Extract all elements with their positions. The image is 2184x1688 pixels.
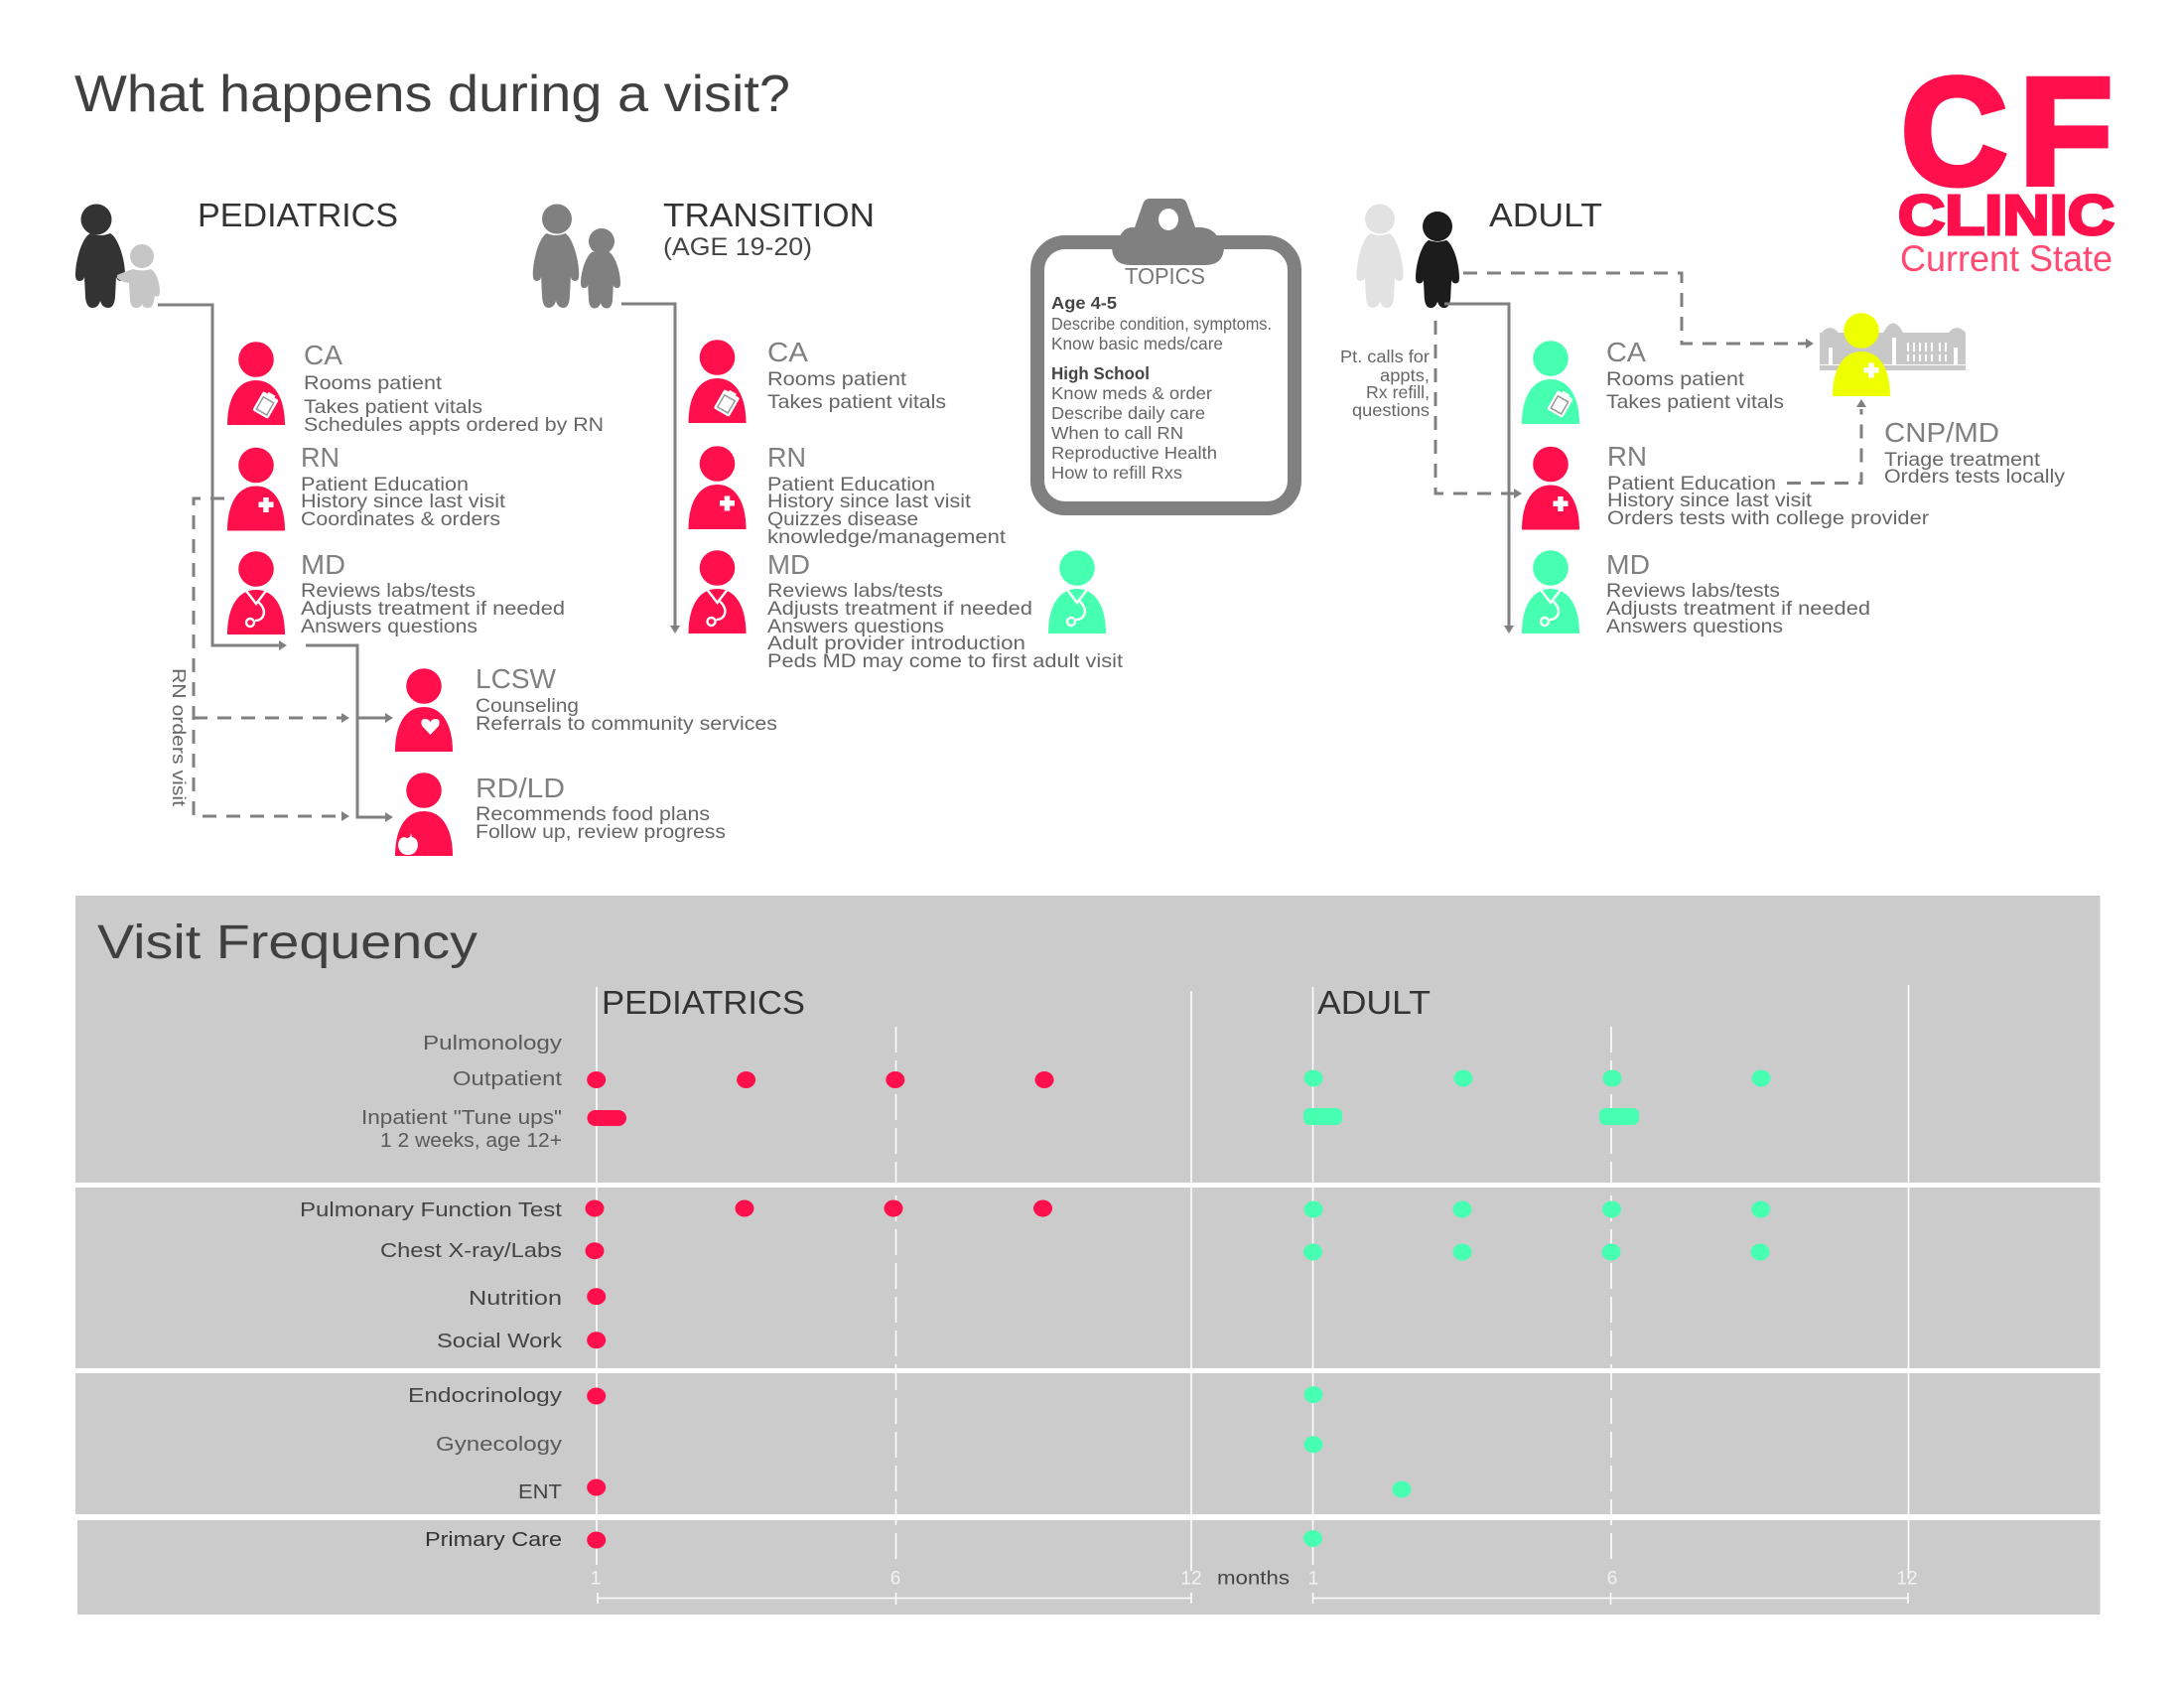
icon: CNP/MD person — [1833, 313, 1890, 396]
text: CA: Rooms patient — [1606, 368, 1745, 390]
icon: RN person — [689, 446, 747, 529]
row labels: Inpatient "Tune ups" — [361, 1107, 562, 1129]
heading: pediatrics: PEDIATRICS — [198, 197, 398, 233]
text: RN: Coordinates & orders — [301, 508, 500, 530]
logo: CF Clinic Current State: CLINIC — [1898, 184, 2115, 247]
page title: What happens during a visit? — [74, 66, 790, 123]
heading: adult column: ADULT — [1317, 984, 1431, 1021]
panel: adult pathway — [1340, 197, 2065, 637]
text: RD/LD: RD/LD — [476, 773, 565, 803]
text: CA: Takes patient vitals — [767, 391, 946, 413]
text: patient calls note: Pt. calls for — [1340, 347, 1430, 366]
text: high school topics: Describe daily care — [1051, 403, 1205, 423]
icon: two young adults — [533, 205, 620, 309]
text: RN — [1607, 441, 1930, 529]
icon: RN person — [227, 448, 285, 530]
text: CA: Schedules appts ordered by RN — [304, 414, 604, 436]
text: CA: CA — [767, 337, 808, 367]
pediatrics visit dots — [586, 1071, 1054, 1549]
text: CA: Rooms patient — [304, 372, 443, 394]
month grid lines — [597, 985, 1908, 1579]
text: MD: Answers questions — [301, 616, 478, 637]
text: high school topics: Reproductive Health — [1051, 443, 1217, 463]
heading: transition: (AGE 19-20) — [663, 233, 812, 261]
text: high school topics: High School — [1051, 363, 1150, 383]
month axis: 12 — [1896, 1569, 1918, 1589]
arrow: adult care path — [1444, 304, 1514, 633]
text: RD/LD — [476, 773, 726, 843]
text: high school topics: When to call RN — [1051, 423, 1183, 443]
text: CNP/MD — [1884, 417, 2065, 488]
icon: MD person — [227, 551, 285, 634]
month axis: 6 — [1607, 1569, 1617, 1589]
text: CNP/MD: Triage treatment — [1884, 449, 2041, 471]
month axis: months — [1217, 1569, 1290, 1589]
logo: CF Clinic Current State: F — [2019, 47, 2113, 216]
arrow: patient calls to RN — [1435, 321, 1522, 498]
text: MD: Answers questions — [767, 616, 944, 637]
text: age 4-5 topics: Describe condition, symptoms. — [1051, 314, 1272, 334]
row labels: Primary Care — [425, 1529, 562, 1551]
row labels: Gynecology — [436, 1434, 562, 1456]
text: age 4-5 topics: Age 4-5 — [1051, 293, 1117, 313]
text: MD: Adjusts treatment if needed — [767, 598, 1032, 620]
text: RN — [767, 442, 1007, 548]
icon: LCSW person — [395, 668, 453, 752]
text: MD: MD — [767, 549, 810, 580]
text: MD: Reviews labs/tests — [767, 580, 943, 602]
text: RN: History since last visit — [767, 491, 972, 512]
panel: pediatrics pathway — [75, 197, 777, 856]
arrow: path to social work and dietitian — [306, 645, 393, 822]
arrow: RN orders visit dashed path — [194, 498, 349, 821]
text: RN — [301, 442, 506, 530]
text: RN: knowledge/management — [767, 526, 1007, 548]
icon: RN person — [1522, 447, 1579, 530]
text: high school topics: Know meds & order — [1051, 383, 1212, 403]
text: LCSW — [476, 663, 777, 735]
icon: young adult and companion — [1356, 205, 1459, 308]
text: RN: RN — [1607, 441, 1647, 472]
text: MD — [301, 549, 565, 637]
adult visit dots — [1303, 1070, 1771, 1547]
text: MD — [1606, 549, 1870, 637]
text: CA: CA — [1606, 337, 1646, 367]
text: CA — [304, 340, 604, 436]
row labels — [300, 1033, 563, 1551]
text: CA — [767, 337, 946, 413]
heading: visit frequency: Visit Frequency — [97, 916, 478, 969]
arrow: RN to CNP/MD — [1787, 399, 1866, 483]
text: RN: Quizzes disease — [767, 508, 918, 530]
row labels: Pulmonology — [423, 1033, 562, 1055]
icon: CA person — [1522, 341, 1579, 424]
text: LCSW: Referrals to community services — [476, 713, 777, 735]
row labels: Outpatient — [453, 1068, 563, 1090]
row labels: Pulmonary Function Test — [300, 1199, 563, 1221]
panel background bands — [75, 896, 2101, 1615]
text: MD: MD — [301, 549, 345, 580]
text: patient calls note: Rx refill, — [1366, 382, 1430, 402]
text: MD: Answers questions — [1606, 616, 1783, 637]
text: CA: Takes patient vitals — [304, 396, 482, 418]
text: high school topics: How to refill Rxs — [1051, 463, 1182, 483]
text: RN: History since last visit — [301, 491, 506, 512]
text: patient calls note: appts, — [1380, 365, 1430, 385]
month axis: 1 — [591, 1569, 601, 1589]
panel: transition pathway — [533, 197, 1124, 672]
text: CA — [1606, 337, 1784, 413]
icon: college clinic building — [1820, 324, 1966, 370]
text: MD: Peds MD may come to first adult visit — [767, 650, 1124, 672]
text: CA: Rooms patient — [767, 368, 907, 390]
text: RN: Orders tests with college provider — [1607, 507, 1930, 529]
text: RN: RN — [767, 442, 806, 473]
text: MD: Adjusts treatment if needed — [301, 598, 565, 620]
icon: adult MD person — [1048, 550, 1106, 633]
text: RD/LD: Recommends food plans — [476, 803, 710, 825]
icon: MD person — [689, 550, 747, 633]
heading: adult: ADULT — [1489, 197, 1602, 233]
panel: topics clipboard — [1037, 199, 1295, 508]
text: CNP/MD: CNP/MD — [1884, 417, 1999, 448]
text: LCSW: Counseling — [476, 695, 579, 717]
arrow: transition path — [621, 304, 680, 633]
icon: clipboard — [1037, 199, 1295, 508]
text: RN: Patient Education — [1607, 473, 1776, 494]
heading: topics: TOPICS — [1125, 263, 1205, 289]
heading: pediatrics column: PEDIATRICS — [602, 984, 805, 1021]
row labels: 1 2 weeks, age 12+ — [380, 1130, 562, 1152]
text: patient calls note: questions — [1352, 400, 1430, 420]
text: RN: RN — [301, 442, 340, 473]
logo: CF Clinic Current State: Current State — [1900, 238, 2113, 279]
row labels: Nutrition — [469, 1288, 562, 1310]
text: patient calls note — [1340, 347, 1430, 420]
icon: CA person — [689, 340, 747, 423]
panel: visit frequency — [75, 896, 2101, 1615]
logo: CF Clinic Current State: C — [1901, 47, 2007, 216]
month axis — [591, 1569, 1918, 1605]
row labels: ENT — [518, 1481, 562, 1503]
month axis: 12 — [1180, 1569, 1202, 1589]
text: CNP/MD: Orders tests locally — [1884, 466, 2065, 488]
text: MD: MD — [1606, 549, 1650, 580]
text: MD — [767, 549, 1124, 672]
icon: CA person — [227, 342, 285, 425]
row labels: Endocrinology — [408, 1385, 562, 1407]
icon: RD/LD person — [395, 773, 453, 856]
text: MD: Reviews labs/tests — [1606, 580, 1780, 602]
text: MD: Adjusts treatment if needed — [1606, 598, 1870, 620]
heading: transition — [663, 197, 875, 261]
label: RN orders visit: RN orders visit — [169, 668, 189, 806]
month axis: 6 — [890, 1569, 900, 1589]
text: age 4-5 topics: Know basic meds/care — [1051, 334, 1223, 353]
month axis: 1 — [1308, 1569, 1318, 1589]
row labels: Social Work — [437, 1331, 563, 1352]
icon: parent and child — [75, 205, 160, 308]
text: age 4-5 topics — [1051, 293, 1272, 353]
text: RN: Patient Education — [767, 474, 935, 495]
text: RN: History since last visit — [1607, 490, 1813, 511]
heading: transition: TRANSITION — [663, 197, 875, 233]
text: RD/LD: Follow up, review progress — [476, 821, 726, 843]
text: high school topics — [1051, 363, 1217, 483]
text: RN: Patient Education — [301, 474, 469, 495]
text: MD: Adult provider introduction — [767, 633, 1025, 654]
text: LCSW: LCSW — [476, 663, 557, 694]
row labels: Chest X-ray/Labs — [380, 1240, 562, 1262]
text: MD: Reviews labs/tests — [301, 580, 476, 602]
arrow: to community clinic — [1463, 273, 1814, 349]
logo: CF Clinic Current State — [1898, 47, 2115, 279]
icon: MD person — [1522, 550, 1579, 633]
text: CA: Takes patient vitals — [1606, 391, 1784, 413]
text: CA: CA — [304, 340, 342, 370]
arrow: main care path — [158, 305, 287, 650]
